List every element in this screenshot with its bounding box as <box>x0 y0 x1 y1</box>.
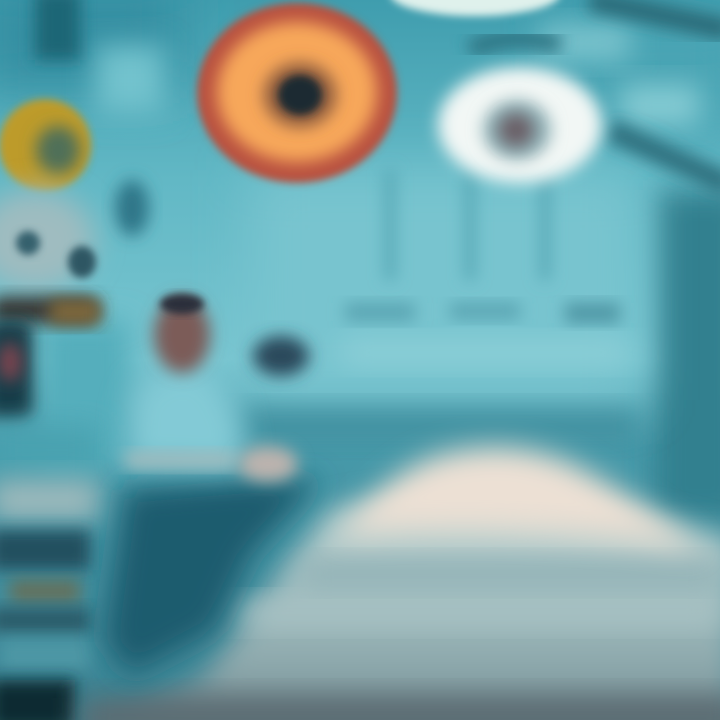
patient drape dome <box>340 447 700 550</box>
wall panels <box>240 170 640 444</box>
icon: orange surgical lamp <box>197 3 397 183</box>
surgeon waist <box>125 452 235 468</box>
lamp arms <box>80 0 720 185</box>
dark wall object <box>253 336 309 376</box>
icon: top white lamp <box>390 0 560 16</box>
surgeon figure <box>105 294 320 675</box>
icon: small wall disc <box>115 180 149 236</box>
surgical table <box>80 495 720 720</box>
equipment stack on left <box>0 190 100 720</box>
surgeon hand <box>238 446 298 482</box>
surgeon head <box>154 297 210 373</box>
icon: white surgical lamp <box>438 67 602 183</box>
surgeon cap <box>160 294 204 314</box>
icon: yellow lamp <box>0 99 91 191</box>
surgeon torso <box>125 364 245 470</box>
surgeon trousers <box>105 480 320 675</box>
ceiling and side shading <box>0 0 720 520</box>
